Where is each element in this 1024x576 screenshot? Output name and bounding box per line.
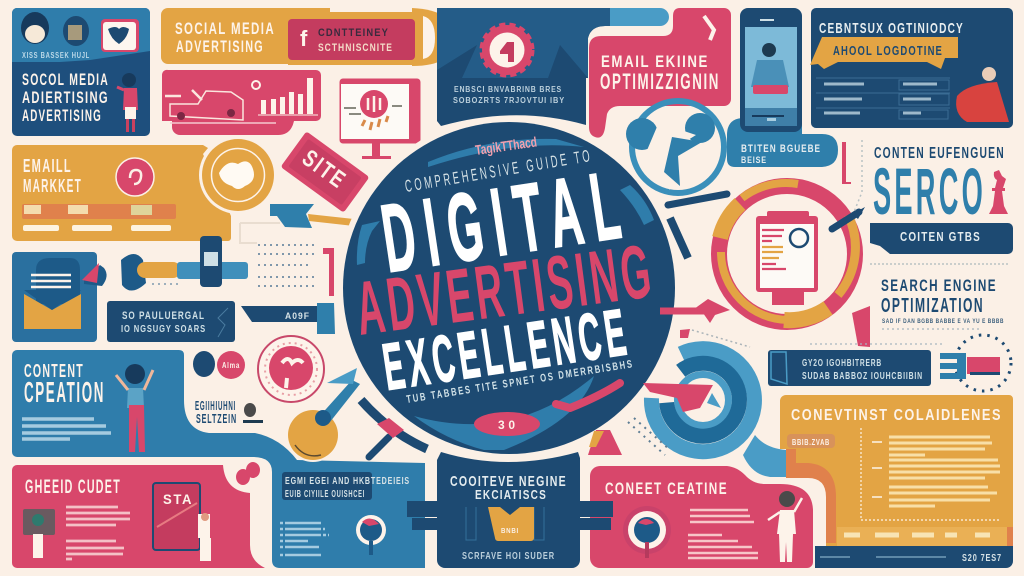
text block: small navy label	[195, 398, 263, 426]
panel: social media advertising header: ADVERTISING	[176, 37, 264, 56]
heading: advertising: ADVERTISING	[351, 229, 656, 351]
icon: blue broken heart ring	[626, 101, 727, 258]
icon: navy arc bars with pink marker	[361, 400, 427, 457]
callout: blue pill	[727, 118, 838, 167]
panel: pill device strip	[121, 236, 248, 291]
heading: digital: DIGITAL	[375, 150, 626, 292]
panel: right navy table	[810, 8, 1013, 128]
panel: social media advertising header: SOCIAL MEDIA	[175, 19, 275, 38]
text block: search engine optimization	[810, 264, 1008, 344]
panel: gear header navy	[437, 8, 669, 126]
subtitle: COMPREHENSIVE GUIDE TO	[404, 146, 592, 196]
panel: creative checklist pink: STA	[163, 491, 193, 507]
panel: content creating pink: CONEET CEATINE	[605, 479, 728, 498]
panel: content creating pink	[590, 466, 813, 568]
panel: content creation with blue list: CONTENT	[24, 361, 84, 381]
panel: email market	[12, 145, 231, 241]
panel: social media profile: ADVERTISING	[22, 106, 102, 125]
icon: pink confetti cone	[588, 418, 670, 455]
panel: gear header navy: ENBSCI BNVABRINB BRES	[454, 85, 562, 94]
icons: two small badges: Alma	[222, 361, 240, 370]
callout: navy stat bar: SUDAB BABBOZ IOUHCBIIBIN	[802, 371, 923, 382]
panel: gold guidelines	[780, 395, 1013, 546]
callout: blue pill: BTITEN BGUEBE	[741, 143, 821, 155]
icon: dotted gadget	[940, 335, 1011, 391]
chart: progress ring with device	[719, 183, 855, 322]
callout: pointer tag: A09F	[285, 311, 310, 321]
brand tag: TagikTThacd	[474, 133, 538, 158]
panel: social media advertising header	[161, 8, 455, 66]
panel: email engine optimization: OPTIMIZZIGNIN	[600, 69, 720, 94]
tagline: TUB TABBES TITE SPNET OS DMERRBISBHS	[406, 358, 633, 406]
text block: small navy label: SELTZEIN	[196, 411, 237, 426]
panel: social media advertising header: CDNTTEINEY	[318, 27, 389, 39]
swoosh: top	[428, 139, 584, 167]
icon: heart seal	[258, 336, 324, 402]
panel: dotted data strip	[240, 223, 334, 296]
icon: navy pen	[832, 140, 865, 229]
panel: email market: MARKKET	[23, 176, 82, 196]
icon: blue target ring with tail	[643, 349, 786, 477]
panel: competitive engine navy: SCRFAVE HOI SUDER	[462, 551, 555, 562]
icon: phone	[740, 8, 802, 132]
chart: main circular title badge	[337, 116, 681, 460]
device screen	[756, 211, 818, 305]
panel: pink vehicle and bar chart	[162, 70, 321, 135]
number pill: 30	[498, 418, 515, 432]
callout: content gtbs bar: COITEN GTBS	[900, 229, 981, 244]
icon: blue flag arrow	[270, 204, 365, 228]
icon: gold badge	[199, 136, 277, 214]
number pill	[474, 412, 540, 436]
panel: email engine optimization: EMAIL EKIINE	[601, 52, 709, 71]
panel: email engine optimization	[589, 8, 731, 138]
panel: gear header navy: SOBOZRTS 7RJOVTUI IBY	[453, 96, 565, 105]
callout: navy text tag: IO NGSUGY SOARS	[121, 324, 206, 335]
icons: two small badges	[193, 351, 245, 379]
panel: competitive engine navy: BNBI	[501, 528, 519, 535]
panel: gold guidelines: BBIB.ZVAB	[792, 437, 830, 447]
callout: blue pill: BEISE	[741, 155, 767, 165]
panel: social media profile: SOCOL MEDIA	[22, 70, 109, 89]
text block: small navy label: EGIIHIUHNI	[195, 398, 236, 413]
panel: bottom navy strip: S20 7ES7	[962, 553, 1002, 564]
icon: site ticket: SITE	[297, 145, 352, 195]
panel: social media profile: ADIERTISING	[22, 88, 109, 107]
icon: site ticket	[281, 131, 369, 213]
callout: navy stat bar	[768, 350, 931, 386]
panel: social media profile: XISS BASSEK HUJL	[22, 51, 90, 60]
callout: navy text tag	[107, 301, 235, 342]
panel: right navy table: AHOOL LOGDOTINE	[833, 44, 943, 58]
callout: pointer tag	[241, 303, 335, 334]
panel: content creation with blue list: CPEATION	[24, 377, 105, 409]
heading: excellence: EXCELLENCE	[378, 296, 630, 404]
callout: navy text tag: SO PAULUERGAL	[122, 310, 205, 322]
panel: social media advertising header: f	[300, 26, 310, 51]
panel: content creation with blue list	[12, 350, 425, 568]
panel: competitive engine navy: COOITEVE NEGINE	[450, 473, 567, 490]
callout: content gtbs bar	[870, 223, 1013, 254]
panel: envelope	[12, 252, 107, 342]
panel: content creation with blue list: EUIB CIYIILE OUISHCEI	[285, 489, 365, 500]
icon: presentation monitor	[340, 79, 420, 159]
panel: content creation with blue list: EGMI EGEI AND HKBTEDEIEIS	[285, 476, 410, 487]
panel: competitive engine navy: EKCIATISCS	[475, 487, 547, 502]
panel: email market: EMAILL	[23, 156, 72, 176]
panel: bottom navy strip	[815, 546, 1013, 568]
panel: competitive engine navy	[407, 452, 613, 568]
arrow: pink pointer	[660, 299, 870, 347]
icon: gold magnifier	[286, 368, 360, 462]
panel: creative checklist pink	[12, 462, 265, 568]
panel: social media profile	[12, 8, 150, 136]
callout: navy stat bar: GY2O IGOHBITRERB	[802, 358, 882, 369]
panel: creative checklist pink: GHEEID CUDET	[25, 477, 121, 498]
panel: social media advertising header: SCTHNISCNITE	[318, 42, 393, 54]
